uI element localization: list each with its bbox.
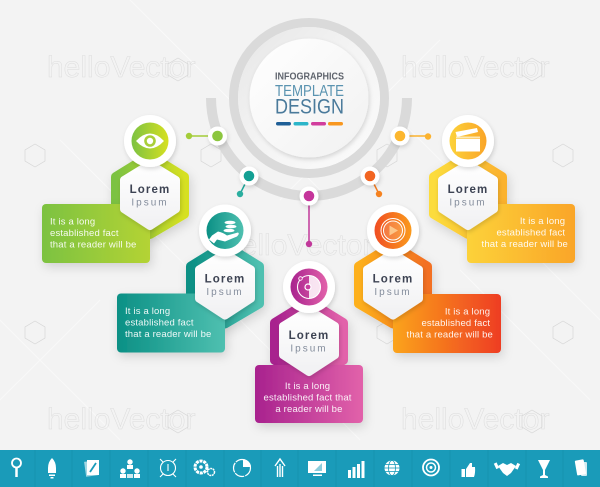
icon: eye (136, 134, 164, 148)
central arc and rings (211, 22, 407, 196)
icon: gears (195, 461, 214, 476)
text block: teal: It is a long (125, 306, 170, 317)
icon: arrow up (275, 459, 285, 477)
icon: bar chart (348, 461, 364, 478)
icon: orbit (298, 276, 320, 298)
icon: compass clock (160, 459, 176, 477)
icon: pie chart (234, 459, 251, 476)
icon: thumbs up (462, 463, 475, 477)
text block: teal: that a reader will be (125, 329, 211, 340)
panel: orange module: Ipsum (374, 287, 412, 298)
panel: magenta module: Ipsum (290, 344, 328, 354)
text block: yellow: It is a long (520, 216, 565, 227)
text block: green: established fact (50, 228, 119, 239)
panel: teal module: Lorem (205, 274, 245, 286)
connector: green (186, 126, 227, 146)
connector: teal (237, 166, 258, 197)
panel: yellow module: Lorem (448, 184, 488, 196)
title: INFOGRAPHICS (275, 72, 344, 82)
panel: orange module: Lorem (373, 274, 413, 286)
icon: cocktail glass (538, 460, 550, 478)
icon: hand with coins (209, 221, 239, 244)
watermark pattern: helloVector (224, 229, 372, 262)
panel: teal module: Ipsum (206, 287, 244, 298)
icon: monitor (308, 461, 326, 476)
icon: handshake (494, 462, 520, 476)
watermark pattern: helloVector (47, 51, 195, 84)
text block: teal: established fact (125, 318, 194, 328)
icon: play button (381, 218, 405, 242)
watermark pattern: helloVector (401, 403, 549, 436)
text block: magenta: It is a long (285, 381, 330, 392)
title: TEMPLATE (275, 83, 344, 100)
title: DESIGN (275, 96, 344, 118)
watermark pattern: helloVector (401, 51, 549, 84)
text block: green: It is a long (50, 216, 95, 228)
icon: target (423, 460, 439, 476)
panel: magenta module: Lorem (289, 330, 329, 342)
connector: magenta (300, 186, 318, 247)
icon: key (12, 458, 21, 477)
text block: magenta: established fact that (264, 392, 352, 404)
text block: magenta: a reader will be (275, 404, 343, 415)
title (275, 72, 344, 126)
connector: orange (360, 166, 382, 197)
text block: orange: established fact (421, 318, 490, 329)
icon: money notes (575, 459, 587, 476)
text block: green: that a reader will be (50, 240, 136, 250)
icon: organization (120, 459, 140, 478)
text block: orange: that a reader will be (407, 330, 493, 340)
footer icon band (0, 450, 600, 487)
text block: orange: It is a long (445, 306, 490, 318)
text block: yellow: that a reader will be (482, 239, 568, 250)
panel: green module (42, 115, 184, 263)
watermark pattern: helloVector (47, 403, 195, 436)
panel: teal module (117, 204, 259, 352)
connector: yellow (390, 126, 431, 146)
icon: rocket (48, 458, 56, 478)
panel: orange module (359, 204, 501, 353)
panel: yellow module (434, 115, 575, 263)
panel: magenta module (255, 261, 363, 423)
panel: yellow module: Ipsum (449, 198, 487, 208)
icon: globe (384, 460, 400, 476)
panel: green module: Lorem (130, 184, 170, 196)
icon: notes (84, 460, 99, 477)
icon: clapperboard (456, 128, 480, 152)
panel: green module: Ipsum (131, 198, 169, 208)
text block: yellow: established fact (496, 228, 565, 238)
